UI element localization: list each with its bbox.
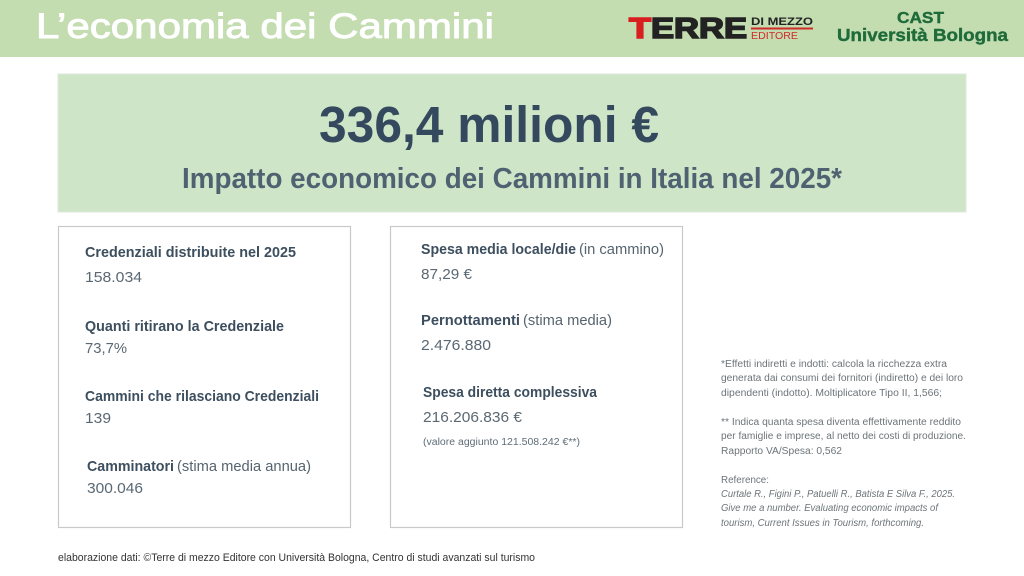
headline subtitle: Impatto economico dei Cammini in Italia nel 2025* [182, 163, 843, 195]
stat: spesa media [421, 241, 664, 283]
footnotes: Rapporto VA/Spesa: 0,562 [721, 446, 842, 457]
footnotes [721, 359, 966, 529]
stat: credenziali distribuite: Credenziali distribuite nel 2025 [85, 244, 296, 261]
footnotes: per famiglie e imprese, al netto dei costi di produzione. [721, 431, 966, 442]
source credit: elaborazione dati: ©Terre di mezzo Editore con Università Bologna, Centro di studi avanzati sul turismo [58, 552, 535, 564]
logo: Terre di Mezzo Editore [629, 13, 814, 45]
panel: credentials and walkers [58, 226, 350, 528]
logo: Terre di Mezzo Editore: ERRE [651, 13, 747, 45]
stat: cammini [85, 388, 319, 427]
title: L’economia dei Cammini [36, 7, 494, 46]
logo: Terre di Mezzo Editore: DI MEZZO [751, 16, 814, 28]
stat: camminatori [87, 458, 311, 497]
footnotes: tourism, Current Issues in Tourism, forthcoming. [721, 518, 924, 529]
stat: spesa media: (in cammino) [579, 241, 664, 258]
logo: CAST Università Bologna [837, 10, 1008, 45]
panel: spending [390, 226, 682, 528]
stat: cammini: Cammini che rilasciano Credenziali [85, 388, 319, 405]
stat: camminatori: (stima media annua) [177, 458, 311, 475]
logo: CAST Università Bologna: Università Bologna [837, 25, 1008, 45]
logo: CAST Università Bologna: CAST [897, 10, 945, 27]
stat: pernottamenti: (stima media) [523, 312, 612, 329]
stat: spesa diretta: Spesa diretta complessiva [423, 384, 598, 401]
headline number: 336,4 milioni € [319, 96, 659, 153]
panel: headline impact [58, 74, 966, 212]
stat: pernottamenti [421, 312, 612, 354]
footnotes: generata dai consumi dei fornitori (indiretto) e dei loro [721, 373, 963, 384]
logo: Terre di Mezzo Editore: EDITORE [751, 30, 798, 42]
footnotes: Reference: [721, 475, 769, 486]
footnotes: Curtale R., Figini P., Patuelli R., Batista E Silva F., 2025. [721, 489, 955, 500]
stat: quanti ritirano [85, 318, 284, 357]
stat: spesa media: 87,29 € [421, 266, 473, 283]
stat: pernottamenti: Pernottamenti [421, 312, 520, 329]
stat: cammini: 139 [85, 410, 111, 427]
logo: Terre di Mezzo Editore: T [629, 13, 651, 45]
stat: credenziali distribuite: 158.034 [85, 269, 142, 286]
stat: spesa media: Spesa media locale/die [421, 241, 576, 258]
stat: spesa diretta: 216.206.836 € [423, 409, 523, 426]
footnotes: dipendenti (indotto). Moltiplicatore Tipo II, 1,566; [721, 388, 942, 399]
header band [0, 0, 1024, 57]
footnotes: Give me a number. Evaluating economic impacts of [721, 503, 939, 514]
footnotes: ** Indica quanta spesa diventa effettivamente reddito [721, 417, 961, 428]
stat: quanti ritirano: Quanti ritirano la Credenziale [85, 318, 284, 335]
footnotes: *Effetti indiretti e indotti: calcola la ricchezza extra [721, 359, 947, 370]
stat: quanti ritirano: 73,7% [85, 340, 127, 357]
stat: camminatori: 300.046 [87, 480, 143, 497]
stat: camminatori: Camminatori [87, 458, 174, 475]
stat: spesa diretta: (valore aggiunto 121.508.242 €**) [423, 437, 580, 448]
stat: credenziali distribuite [85, 244, 296, 286]
stat: spesa diretta [423, 384, 598, 448]
stat: pernottamenti: 2.476.880 [421, 337, 491, 354]
